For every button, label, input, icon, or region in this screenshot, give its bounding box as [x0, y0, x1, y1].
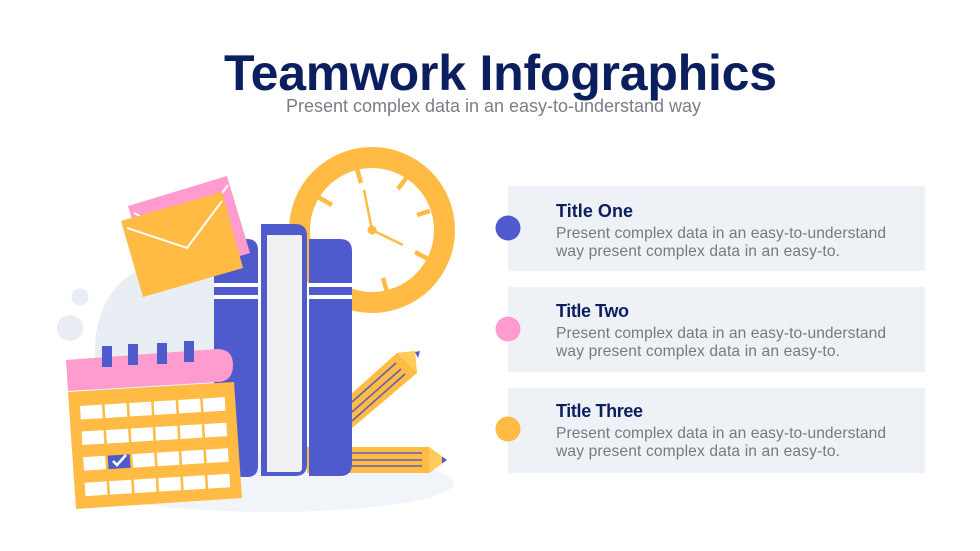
background blob [95, 262, 225, 420]
marker dot one [496, 216, 520, 240]
icon: yellow envelope [121, 192, 243, 297]
panel: title one [496, 186, 925, 271]
text block two: way present complex data in an easy-to. [555, 343, 840, 360]
text block one: Present complex data in an easy-to-understand [556, 225, 886, 242]
icon: middle book [261, 224, 307, 476]
text block two [555, 325, 886, 360]
icon: diagonal pencil [350, 351, 420, 428]
heading: title one: Title One [556, 201, 633, 221]
text block three: way present complex data in an easy-to. [555, 443, 840, 460]
illustration: teamwork desk items [57, 158, 454, 512]
ground shadow [86, 454, 454, 512]
icon: pink envelope [128, 176, 250, 283]
icon: horizontal pencil [307, 447, 447, 473]
decorative bubbles [57, 288, 88, 341]
heading: title three: Title Three [556, 401, 643, 421]
panel: title three [496, 388, 925, 473]
icon: clock [300, 158, 444, 302]
icon: calendar [66, 341, 242, 509]
title: Teamwork Infographics [224, 45, 777, 101]
text block two: Present complex data in an easy-to-understand [556, 325, 886, 342]
subtitle: Present complex data in an easy-to-understand way [286, 96, 701, 116]
text block one [555, 225, 886, 260]
icon: left book [214, 239, 258, 477]
text block three [555, 425, 886, 460]
icon: right book [309, 239, 352, 476]
heading: title two: Title Two [556, 301, 629, 321]
marker dot three [496, 416, 520, 442]
panel: title two [496, 287, 925, 372]
text block one: way present complex data in an easy-to. [555, 243, 840, 260]
text block three: Present complex data in an easy-to-understand [556, 425, 886, 442]
marker dot two [496, 316, 520, 342]
